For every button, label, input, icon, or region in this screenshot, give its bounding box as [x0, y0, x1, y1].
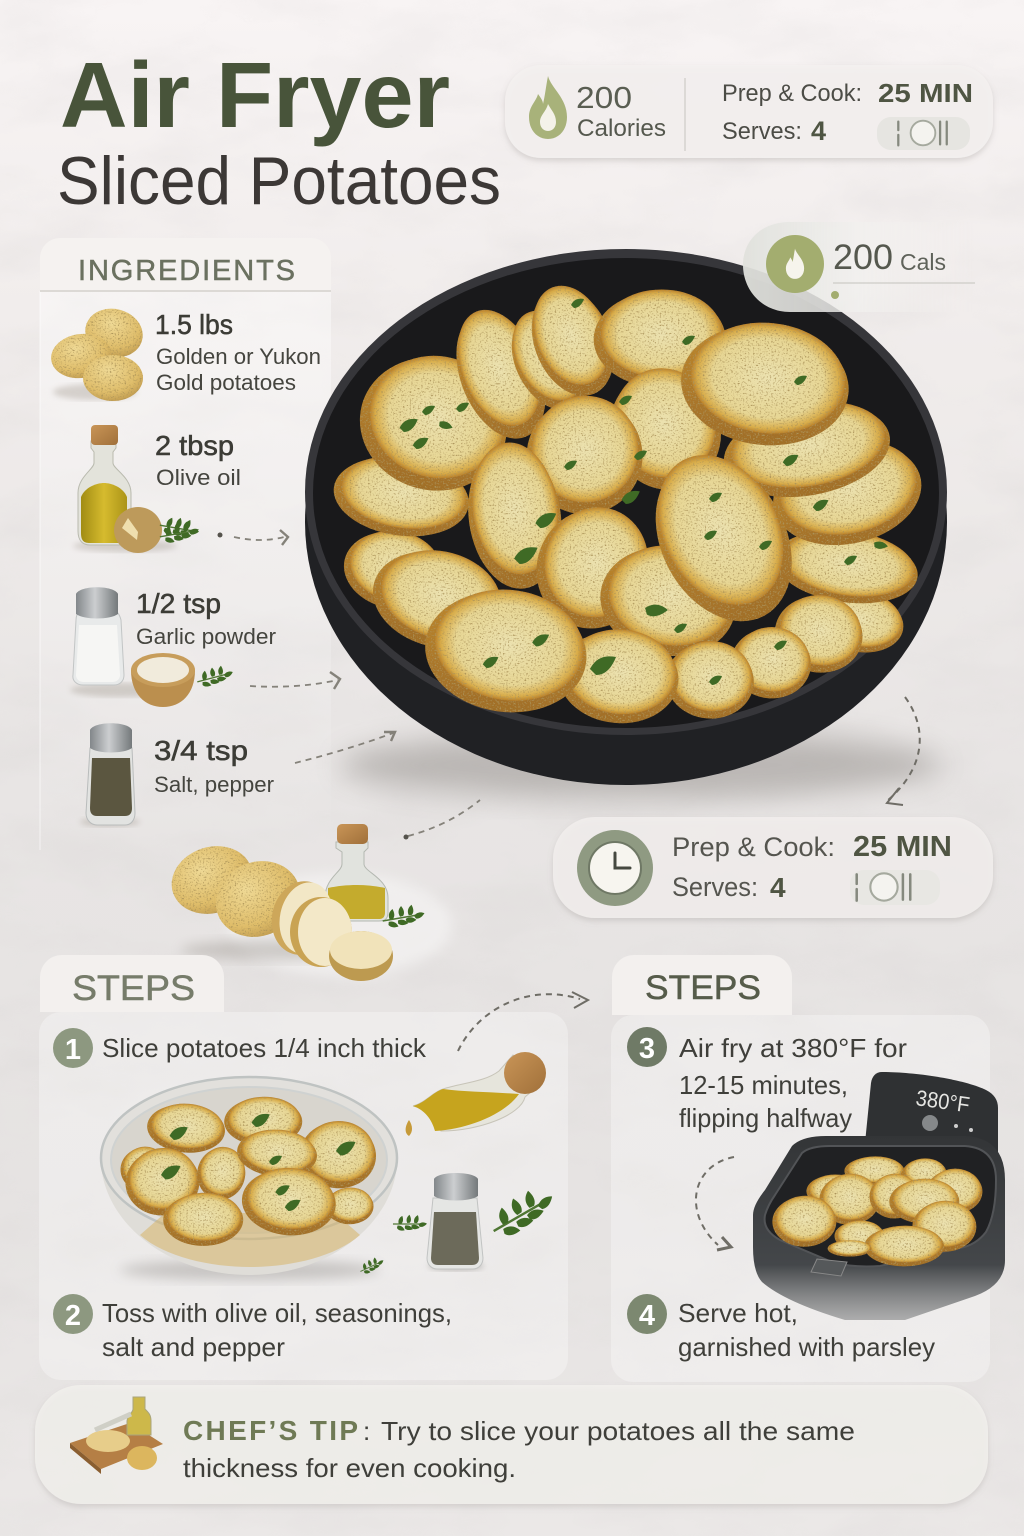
potatoes [163, 836, 312, 949]
tab: steps heading: STEPS [72, 969, 195, 1008]
heading: Air Fryer: Air Fryer [60, 43, 450, 147]
step 4: garnished with parsley [678, 1332, 935, 1362]
icon: plate and cutlery [877, 117, 970, 150]
potato slices [265, 876, 339, 960]
ingredient: olive oil: Olive oil [156, 465, 241, 490]
illustration: pepper shaker and herbs [359, 1173, 558, 1276]
panel: 200 cals badge [743, 222, 975, 312]
panel: chef's tip: thickness for even cooking. [183, 1453, 516, 1483]
calories value: 200 [576, 80, 632, 115]
illustration: glass bowl of seasoned potatoes [101, 1077, 397, 1280]
title [57, 43, 501, 219]
ingredient: salt and pepper: Salt, pepper [154, 772, 274, 797]
panel: top stats pill [505, 65, 993, 158]
tab: steps heading [612, 955, 792, 1015]
panel: steps right [611, 955, 1005, 1382]
ingredient: garlic powder [70, 587, 276, 707]
panel: prep and serves pill: 4 [770, 872, 786, 903]
step 2: Toss with olive oil, seasonings, [102, 1298, 452, 1328]
serves value: 4 [811, 116, 826, 146]
icon: cutting board with potato and oil [70, 1397, 163, 1474]
arrow: bowl to time panel [887, 697, 920, 805]
calories text: 200 [833, 238, 893, 277]
step 2: salt and pepper [102, 1332, 285, 1362]
ingredient: salt and pepper: 3/4 tsp [154, 735, 248, 766]
icon: flame badge [766, 235, 824, 293]
serves label: Serves: [722, 118, 802, 145]
arrow: flip [696, 1157, 734, 1250]
potato slices [329, 274, 931, 728]
bowl body [305, 259, 947, 785]
arrows: ingredients to bowl [218, 530, 480, 840]
prep time value: 25 MIN [878, 78, 973, 108]
tip text: Try to slice your potatoes all the same [381, 1416, 855, 1446]
control panel [863, 1072, 998, 1163]
ingredient: olive oil [73, 425, 241, 553]
step 1: Slice potatoes 1/4 inch thick [102, 1033, 427, 1063]
illustration: air fryer [753, 1072, 1005, 1320]
step 3: 12-15 minutes, [679, 1070, 848, 1100]
step 4: 4 [639, 1300, 655, 1332]
step 3: 3 [639, 1033, 655, 1065]
bowl of air fried potatoes [305, 249, 947, 799]
calories label: Calories [577, 115, 666, 142]
step 4: Serve hot, [678, 1298, 798, 1328]
icon: plate and cutlery [850, 870, 940, 905]
basket [753, 1136, 1005, 1320]
icon: flame [529, 76, 567, 139]
heading: ingredients: INGREDIENTS [78, 255, 295, 287]
step 1: 1 [65, 1034, 81, 1066]
step 2 [53, 1294, 452, 1362]
tab: steps heading: STEPS [645, 969, 761, 1007]
step 1 [53, 1028, 427, 1068]
parsley flakes [400, 299, 888, 685]
step 3: Air fry at 380°F for [679, 1033, 907, 1063]
panel: prep and serves pill: Serves: [672, 872, 758, 902]
ingredient: garlic powder: 1/2 tsp [136, 588, 221, 619]
ingredient: olive oil: 2 tbsp [155, 430, 234, 461]
panel: prep and serves pill: 25 MIN [853, 831, 952, 863]
tab: steps heading [40, 955, 224, 1012]
parsley [161, 1114, 356, 1211]
panel: 200 cals badge: Cals [900, 249, 946, 275]
panel: chef's tip [35, 1385, 988, 1504]
illustration: potatoes and oil still life [163, 824, 452, 981]
illustration: oil bottle [406, 1052, 546, 1136]
panel: ingredients [40, 238, 331, 851]
icon: clock [577, 830, 653, 906]
ingredient: potatoes: Golden or Yukon [156, 344, 321, 369]
ingredient: potatoes [48, 302, 321, 401]
step 3: flipping halfway [679, 1103, 852, 1133]
tip label: CHEF’S TIP [183, 1415, 358, 1446]
ingredient: salt and pepper [80, 723, 274, 827]
step 4 [627, 1294, 935, 1362]
arrow: step 2 to step 3 [458, 992, 588, 1051]
ingredient: potatoes: 1.5 lbs [155, 309, 233, 340]
oil bottle [325, 842, 388, 921]
subheading: Sliced Potatoes: Sliced Potatoes [57, 143, 501, 219]
panel: chef's tip: : [363, 1416, 370, 1446]
illustration: air fryer: 380°F [914, 1085, 971, 1117]
panel: prep and serves pill [553, 817, 993, 918]
step 2: 2 [65, 1300, 81, 1332]
ingredient: potatoes: Gold potatoes [156, 370, 296, 395]
ingredient: garlic powder: Garlic powder [136, 624, 276, 649]
panel: steps left [39, 955, 568, 1380]
panel: prep and serves pill: Prep & Cook: [672, 832, 835, 862]
prep and cook label: Prep & Cook: [722, 80, 862, 107]
step 3 [627, 1027, 907, 1133]
